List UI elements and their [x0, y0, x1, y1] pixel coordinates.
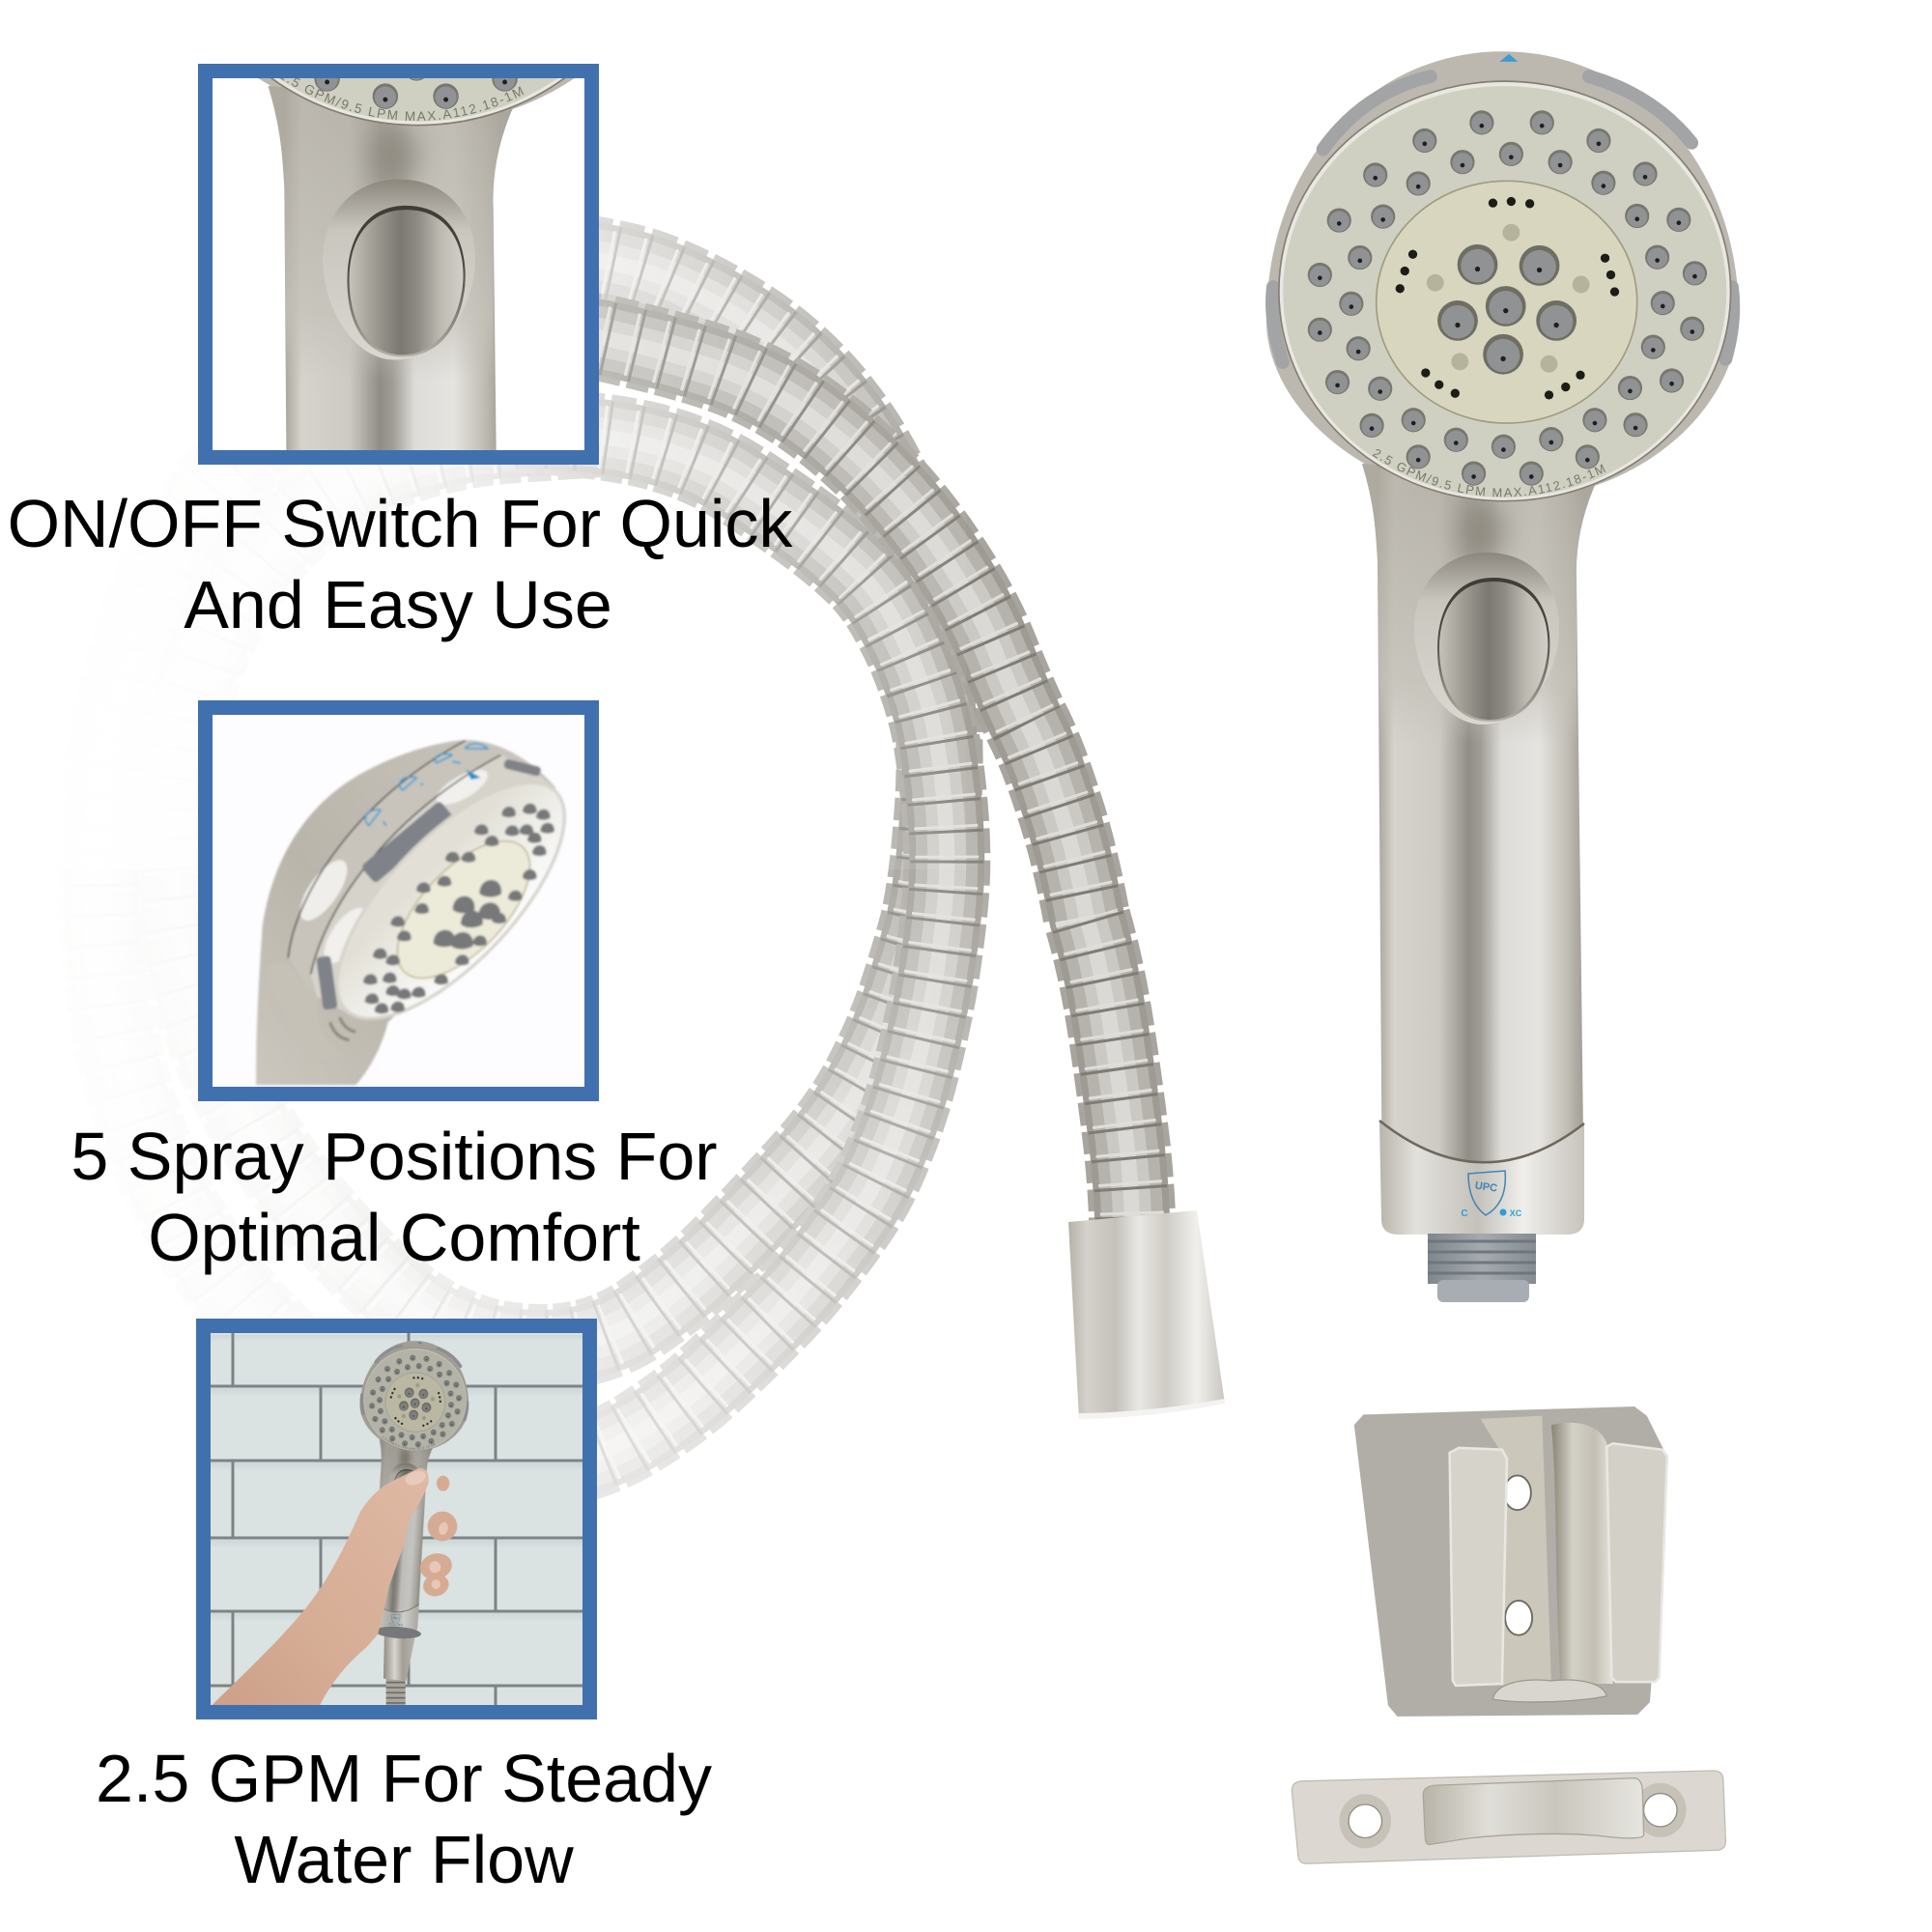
arm and palm	[213, 1468, 429, 1705]
bracket left arm	[1450, 1448, 1507, 1686]
hose and connector in hand	[384, 1631, 415, 1707]
hose front run fade	[0, 97, 966, 869]
band divider lines	[288, 741, 500, 974]
panel: spray positions close-up	[205, 707, 600, 1094]
frame	[205, 71, 591, 458]
frame	[205, 707, 591, 1094]
mounting hole top	[1504, 1475, 1531, 1510]
bracket right arm	[1606, 1443, 1667, 1682]
certification mark: C	[1461, 1208, 1468, 1219]
bracket channel	[1551, 1423, 1613, 1684]
band highlights	[292, 763, 493, 970]
hand shower held up	[344, 1337, 472, 1634]
finger nails	[429, 1521, 449, 1589]
hose end connector	[1068, 1210, 1225, 1419]
bracket body	[1354, 1406, 1668, 1717]
threaded inlet	[1428, 1234, 1536, 1302]
thumb nail	[404, 1468, 428, 1488]
caption: spray positions: Optimal Comfort	[148, 1200, 640, 1275]
drain holes	[1427, 224, 1590, 373]
caption: flow rate: 2.5 GPM For Steady	[96, 1741, 712, 1816]
left screw hole	[1340, 1794, 1391, 1848]
centre disc	[375, 819, 553, 1001]
selector band	[288, 741, 555, 1016]
mounting hole bottom	[1505, 1601, 1532, 1635]
hose strand: front run to connector	[517, 335, 1132, 1225]
caption: on/off switch: ON/OFF Switch For Quick	[8, 486, 793, 561]
caption: spray positions: 5 Spray Positions For	[71, 1119, 718, 1194]
hand gripping the handle	[213, 1468, 463, 1705]
nozzles	[363, 804, 554, 1013]
head face	[301, 748, 600, 1053]
spray mode icons	[365, 744, 488, 826]
handle body	[1362, 464, 1596, 1235]
right screw hole	[1634, 1783, 1687, 1837]
fingers	[417, 1476, 463, 1599]
wall mounting plate	[1292, 1771, 1725, 1863]
wall bracket	[1354, 1406, 1668, 1717]
bracket back plate	[1481, 1416, 1551, 1699]
hose strand: middle coil	[100, 337, 947, 1470]
spray nozzles	[1308, 110, 1707, 486]
caption: flow rate: Water Flow	[234, 1822, 574, 1897]
spray selector grips	[1272, 76, 1733, 362]
certification mark	[1461, 1171, 1522, 1219]
metallic band	[311, 755, 555, 1016]
tile wall	[211, 1333, 582, 1705]
caption: on/off switch: And Easy Use	[184, 567, 612, 642]
panel: flow rate lifestyle photo	[203, 1325, 589, 1712]
panel: on/off switch close-up	[198, 64, 599, 465]
head back shell	[1266, 51, 1739, 501]
main hand shower	[1265, 51, 1741, 1235]
close-up of handle and button	[259, 78, 574, 450]
selector grips	[316, 758, 542, 1010]
position triangle	[467, 770, 481, 780]
raised centre lug	[1423, 1778, 1644, 1845]
lower collar	[1379, 1121, 1584, 1235]
plate base	[1292, 1771, 1725, 1863]
pointer triangle	[1499, 54, 1518, 62]
frame	[203, 1325, 589, 1712]
certification mark: XC	[1510, 1208, 1522, 1218]
neck detail	[266, 962, 343, 1065]
shower head face	[1278, 80, 1731, 502]
on/off button	[1414, 553, 1559, 724]
hose strand: rear coil	[172, 242, 940, 1348]
shower head face: 2.5 GPM/9.5 LPM MAX.A112.18-1M	[1372, 449, 1605, 497]
mist holes	[1396, 197, 1619, 399]
certification mark: UPC	[1474, 1179, 1498, 1195]
head dome and neck	[256, 740, 555, 1085]
flexible metal hose	[0, 0, 1225, 1932]
hose fade overlay	[0, 0, 1014, 1932]
flow rating text	[1372, 455, 1635, 497]
angled shower head	[256, 740, 600, 1085]
bracket cup	[1492, 1680, 1606, 1702]
neck crease	[330, 1017, 355, 1040]
inlet ring	[375, 1625, 421, 1640]
centre disc	[1377, 181, 1637, 423]
